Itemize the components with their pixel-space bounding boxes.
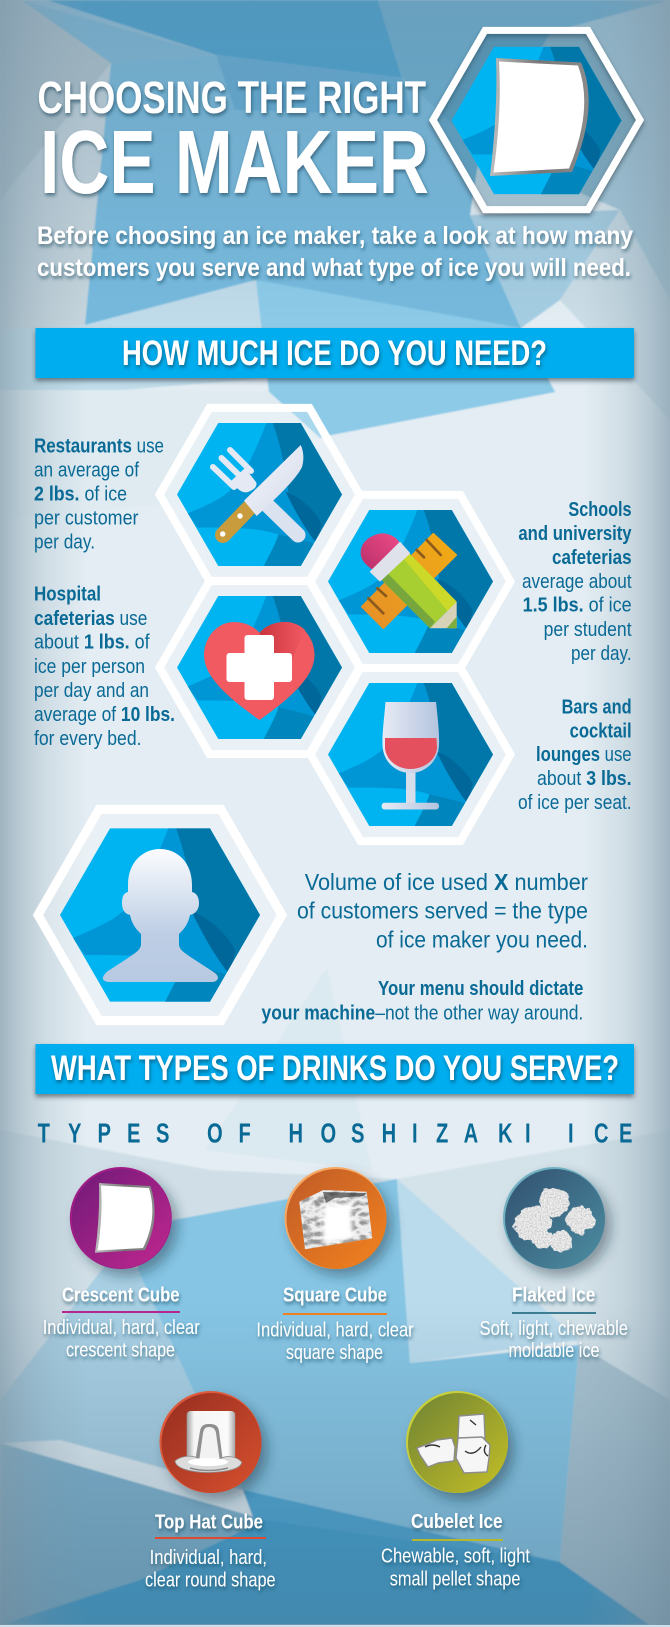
ice type: crescent cube: Individual, hard, clear	[43, 1317, 200, 1339]
subheading: types of Hoshizaki ice: TYPES OF HOSHIZAKI ICE	[38, 1118, 632, 1149]
ice type: top hat cube: Individual, hard,	[150, 1547, 267, 1569]
heading bar: how much ice	[36, 328, 634, 378]
icon: hexagon with crescent ice cube	[433, 30, 640, 210]
ice type: flaked ice: moldable ice	[508, 1340, 600, 1362]
text: ice volume formula: Volume of ice used X number	[305, 869, 588, 895]
text: ice volume formula	[297, 869, 588, 952]
text: schools and university cafeterias: and university	[518, 523, 632, 545]
text: restaurants: 2 lbs. of ice	[34, 484, 127, 506]
intro text	[37, 222, 633, 282]
text: schools and university cafeterias: 1.5 lbs. of ice	[523, 595, 632, 617]
ice type: cubelet ice	[381, 1391, 530, 1591]
ice type: square cube	[256, 1167, 414, 1364]
text: ice volume formula: of ice maker you need.	[376, 926, 588, 952]
ice type: square cube: Square Cube	[283, 1284, 387, 1307]
text: restaurants: per day.	[34, 532, 95, 554]
text: menu should dictate your machine: Your menu should dictate	[378, 978, 583, 1000]
icon: hexagon with wine glass	[310, 668, 510, 841]
text: ice volume formula: of customers served = the type	[297, 898, 588, 924]
text: hospital cafeterias: cafeterias use	[34, 608, 147, 630]
ice type: cubelet ice: Chewable, soft, light	[381, 1546, 530, 1568]
text: bars and cocktail lounges	[518, 696, 632, 814]
text: hospital cafeterias: per day and an	[34, 680, 149, 702]
text: schools and university cafeterias: cafeterias	[552, 547, 632, 569]
ice type: flaked ice: Flaked Ice	[512, 1284, 595, 1307]
icon: hexagon with heart and medical cross	[160, 581, 360, 754]
text: menu should dictate your machine	[262, 978, 583, 1024]
ice type: top hat cube: Top Hat Cube	[155, 1510, 263, 1533]
icon: hexagon with pencil and ruler	[310, 495, 510, 668]
ice type: crescent cube	[43, 1167, 200, 1362]
ice type: flaked ice: Soft, light, chewable	[480, 1318, 628, 1340]
title: ICE MAKER	[40, 113, 429, 213]
icon: hexagon with fork and knife	[160, 408, 360, 581]
icon: hexagon with customer silhouette	[38, 809, 282, 1021]
ice type: cubelet ice: Cubelet Ice	[411, 1510, 503, 1533]
text: hospital cafeterias	[34, 584, 175, 750]
text: bars and cocktail lounges: lounges use	[536, 744, 632, 766]
ice type: flaked ice	[480, 1167, 628, 1362]
text: bars and cocktail lounges: of ice per seat.	[518, 792, 632, 814]
text: menu should dictate your machine: your machine–not the other way around.	[262, 1002, 583, 1024]
text: restaurants: per customer	[34, 508, 139, 530]
text: hospital cafeterias: Hospital	[34, 584, 101, 606]
text: schools and university cafeterias: per student	[544, 619, 632, 641]
text: schools and university cafeterias	[518, 499, 632, 665]
text: schools and university cafeterias: average about	[522, 571, 632, 593]
ice type: cubelet ice: small pellet shape	[390, 1569, 520, 1591]
text: hospital cafeterias: average of 10 lbs.	[34, 704, 175, 726]
ice type: square cube: Individual, hard, clear	[256, 1320, 414, 1342]
ice type: square cube: square shape	[286, 1342, 383, 1364]
title: CHOOSING THE RIGHT	[38, 72, 426, 123]
ice type: crescent cube: Crescent Cube	[62, 1284, 180, 1307]
ice type: crescent cube: crescent shape	[66, 1340, 175, 1362]
text: restaurants	[34, 436, 164, 554]
ice type: top hat cube	[145, 1391, 276, 1592]
text: bars and cocktail lounges: cocktail	[570, 720, 632, 742]
heading bar: how much ice: HOW MUCH ICE DO YOU NEED?	[122, 334, 547, 373]
text: hospital cafeterias: for every bed.	[34, 728, 142, 750]
text: restaurants: Restaurants use	[34, 436, 164, 458]
text: bars and cocktail lounges: Bars and	[562, 696, 632, 718]
text: restaurants: an average of	[34, 460, 139, 482]
text: schools and university cafeterias: per day.	[571, 643, 632, 665]
ice type: top hat cube: clear round shape	[145, 1570, 276, 1592]
text: schools and university cafeterias: Schools	[568, 499, 632, 521]
text: hospital cafeterias: ice per person	[34, 656, 145, 678]
text: hospital cafeterias: about 1 lbs. of	[34, 632, 150, 654]
text: bars and cocktail lounges: about 3 lbs.	[537, 768, 632, 790]
title	[38, 72, 429, 213]
